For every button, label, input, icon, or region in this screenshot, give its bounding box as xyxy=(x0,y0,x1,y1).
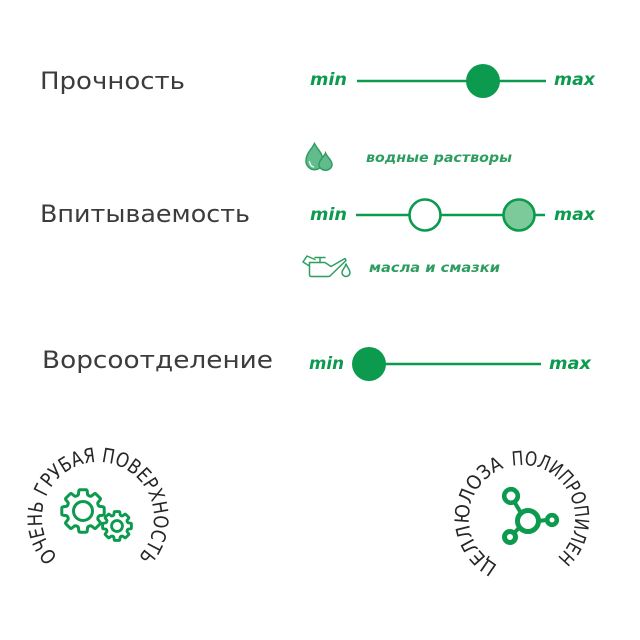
curved text: целлюлоза полипропилен xyxy=(454,450,590,576)
badge: rough surface xyxy=(27,448,169,564)
curved text: очень грубая поверхность: ОЧЕНЬ ГРУБАЯ ПОВЕРХНОСТЬ xyxy=(27,448,169,564)
slider: absorbency: max xyxy=(554,205,596,225)
icon: water drops xyxy=(306,144,332,170)
label: водные растворы: водные растворы xyxy=(366,150,512,166)
label: масла и смазки: масла и смазки xyxy=(369,260,501,276)
slider: strength xyxy=(310,64,596,98)
slider: linting xyxy=(309,347,592,381)
slider: strength: max xyxy=(554,70,596,90)
row: Впитываемость xyxy=(40,200,596,230)
slider: absorbency xyxy=(310,200,596,230)
badge: cellulose polypropylene xyxy=(454,450,590,576)
slider: absorbency: min xyxy=(310,205,347,225)
row: Прочность xyxy=(40,64,596,98)
heading: Ворсоотделение: Ворсоотделение xyxy=(42,346,273,374)
icon: gears xyxy=(62,490,131,540)
heading: Впитываемость: Впитываемость xyxy=(40,200,250,228)
icon: oil can xyxy=(303,256,350,276)
icon: molecule xyxy=(504,489,557,542)
heading: Прочность: Прочность xyxy=(40,67,185,95)
slider: linting: min xyxy=(309,354,344,374)
curved text: целлюлоза полипропилен: ЦЕЛЛЮЛОЗА xyxy=(454,457,504,576)
row: Ворсоотделение xyxy=(42,346,592,381)
slider: strength: min xyxy=(310,70,347,90)
slider: linting: max xyxy=(549,354,592,374)
curved text: целлюлоза полипропилен: ПОЛИПРОПИЛЕН xyxy=(512,450,590,566)
